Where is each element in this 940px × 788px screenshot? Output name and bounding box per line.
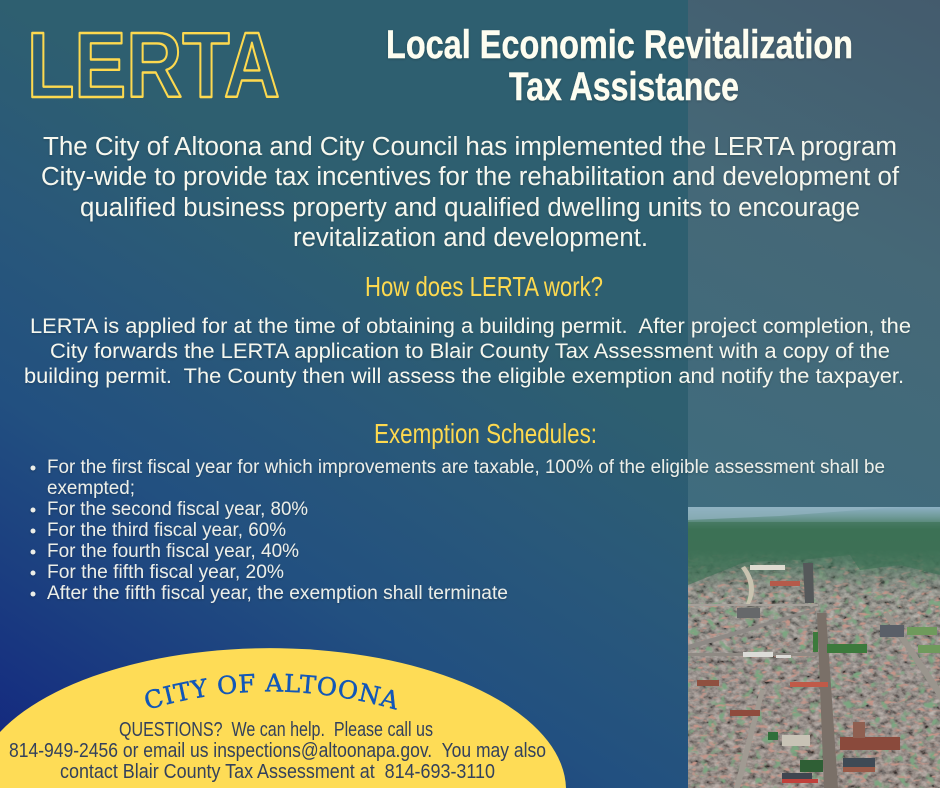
list: exemption schedule bullets: exempted; — [47, 478, 135, 499]
text block: introduction — [41, 133, 900, 252]
text block: how it works: City forwards the LERTA application to Blair County Tax Assessment with a copy of the — [50, 339, 890, 363]
list: exemption schedule bullets: For the fifth fiscal year, 20% — [47, 562, 284, 583]
callout text: contact details: QUESTIONS? We can help. Please call us — [119, 719, 433, 741]
heading: how does LERTA work: How does LERTA work? — [365, 271, 603, 302]
list: exemption schedule bullets: For the third fiscal year, 60% — [47, 520, 286, 541]
callout: yellow contact ellipse — [0, 648, 566, 788]
title — [386, 23, 853, 109]
callout heading: City of Altoona: CITY OF ALTOONA — [145, 673, 397, 710]
text block: introduction: revitalization and development. — [293, 224, 648, 252]
list: exemption schedule bullets: For the second fiscal year, 80% — [47, 499, 308, 520]
text block: how it works — [24, 314, 911, 388]
text block: how it works: building permit. The County then will assess the eligible exemption and notify the taxpayer. — [24, 364, 904, 388]
callout text: contact details: contact Blair County Tax Assessment at 814-693-3110 — [60, 761, 495, 783]
text block: how it works: LERTA is applied for at the time of obtaining a building permit. After project completion, the — [30, 314, 911, 338]
text block: introduction: City-wide to provide tax incentives for the rehabilitation and development of — [41, 163, 900, 191]
list: exemption schedule bullets — [30, 457, 885, 604]
list: exemption schedule bullets: For the first fiscal year for which improvements are taxable, 100% of the eligible assessment shall be — [47, 457, 885, 478]
title: Tax Assistance — [509, 65, 739, 109]
heading: exemption schedules: Exemption Schedules: — [374, 418, 597, 449]
logo: LERTA outline wordmark: LERTA — [27, 13, 280, 117]
text block: introduction: qualified business property and qualified dwelling units to encourage — [80, 194, 860, 222]
list: exemption schedule bullets: After the fifth fiscal year, the exemption shall terminate — [47, 583, 508, 604]
panel: translucent right column — [688, 0, 940, 507]
callout text: contact details — [9, 719, 546, 783]
list: exemption schedule bullets: For the fourth fiscal year, 40% — [47, 541, 299, 562]
callout text: contact details: 814-949-2456 or email us inspections@altoonapa.gov. You may also — [9, 740, 546, 762]
photo: aerial view of Altoona — [688, 507, 940, 788]
text block: introduction: The City of Altoona and City Council has implemented the LERTA program — [43, 133, 897, 161]
